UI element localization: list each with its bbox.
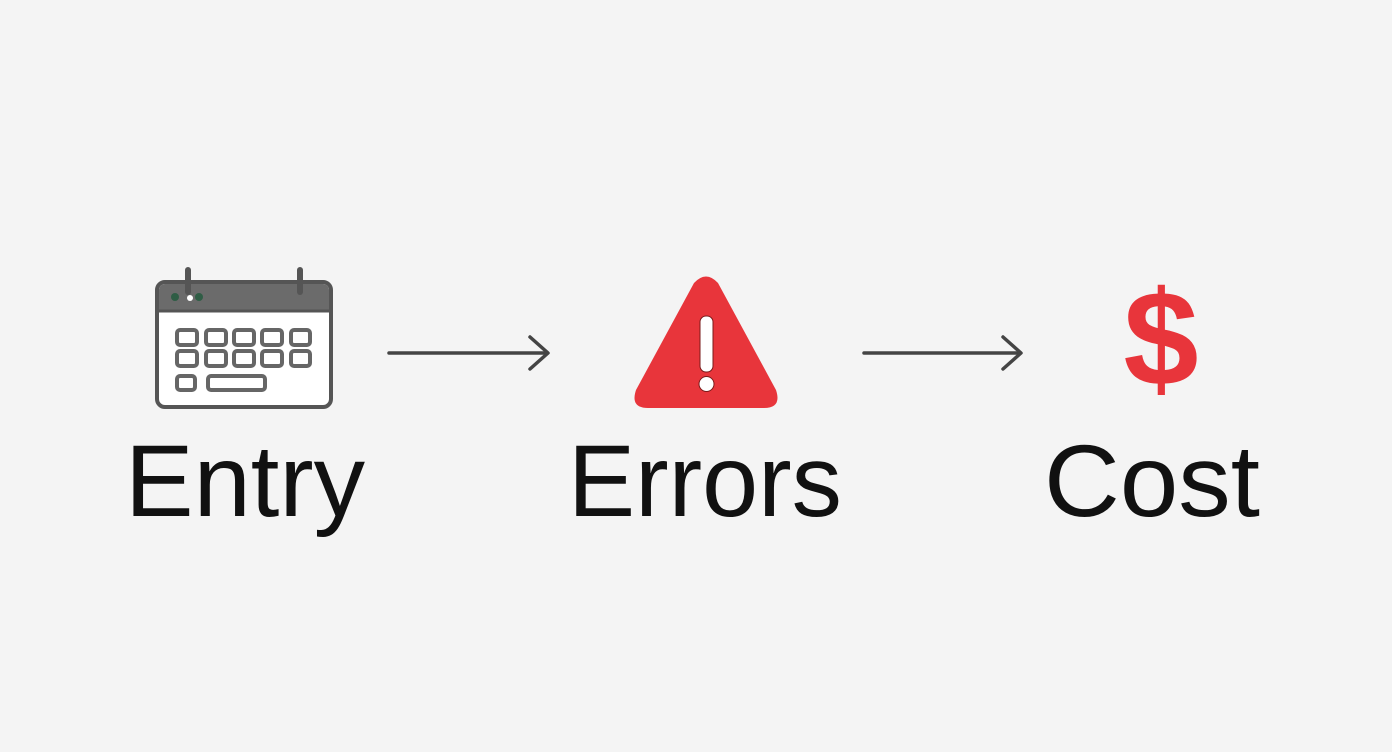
icon: dollar sign: $: [1123, 263, 1199, 414]
icon: calendar: [157, 270, 331, 407]
label: Entry: Entry: [125, 424, 365, 538]
arrow: entry to errors: [389, 337, 548, 369]
label: Cost: Cost: [1044, 424, 1260, 538]
icon: warning triangle: [634, 276, 778, 408]
arrow: errors to cost: [864, 337, 1021, 369]
label: Errors: Errors: [568, 424, 842, 538]
